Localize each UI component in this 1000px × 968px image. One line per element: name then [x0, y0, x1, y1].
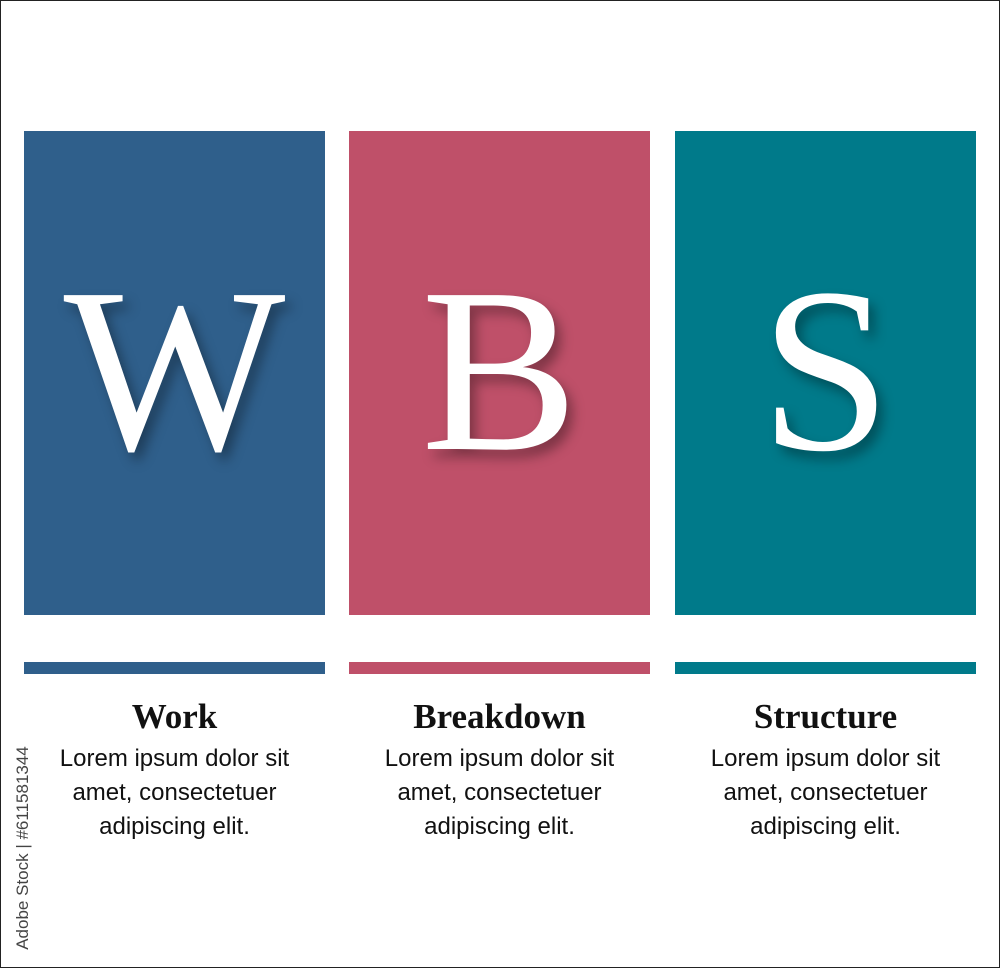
panel: B	[349, 131, 650, 615]
letter B: B	[421, 240, 578, 500]
letter S: S	[760, 240, 891, 500]
watermark id text: Adobe Stock | #611581344	[13, 746, 32, 950]
caption: Structure: Lorem ipsum dolor sit	[711, 745, 940, 772]
bar: W	[24, 662, 325, 674]
caption: Structure: amet, consectetuer	[723, 779, 928, 806]
bar: B	[349, 662, 650, 674]
panel: S	[675, 131, 976, 615]
caption: Work: adipiscing elit.	[99, 813, 250, 840]
caption: Work: Work	[132, 697, 217, 736]
caption: Breakdown: adipiscing elit.	[424, 813, 575, 840]
bar: S	[675, 662, 976, 674]
panel: W	[24, 131, 325, 615]
caption: Breakdown: amet, consectetuer	[397, 779, 602, 806]
caption: Work: Lorem ipsum dolor sit	[60, 745, 289, 772]
caption: Breakdown: Breakdown	[413, 697, 586, 736]
letter W: W	[64, 240, 285, 500]
caption: Breakdown	[385, 697, 614, 840]
caption: Work: amet, consectetuer	[72, 779, 277, 806]
caption: Breakdown: Lorem ipsum dolor sit	[385, 745, 614, 772]
caption: Structure: Structure	[754, 697, 897, 736]
caption: Work	[60, 697, 289, 840]
caption: Structure	[711, 697, 940, 840]
caption: Structure: adipiscing elit.	[750, 813, 901, 840]
